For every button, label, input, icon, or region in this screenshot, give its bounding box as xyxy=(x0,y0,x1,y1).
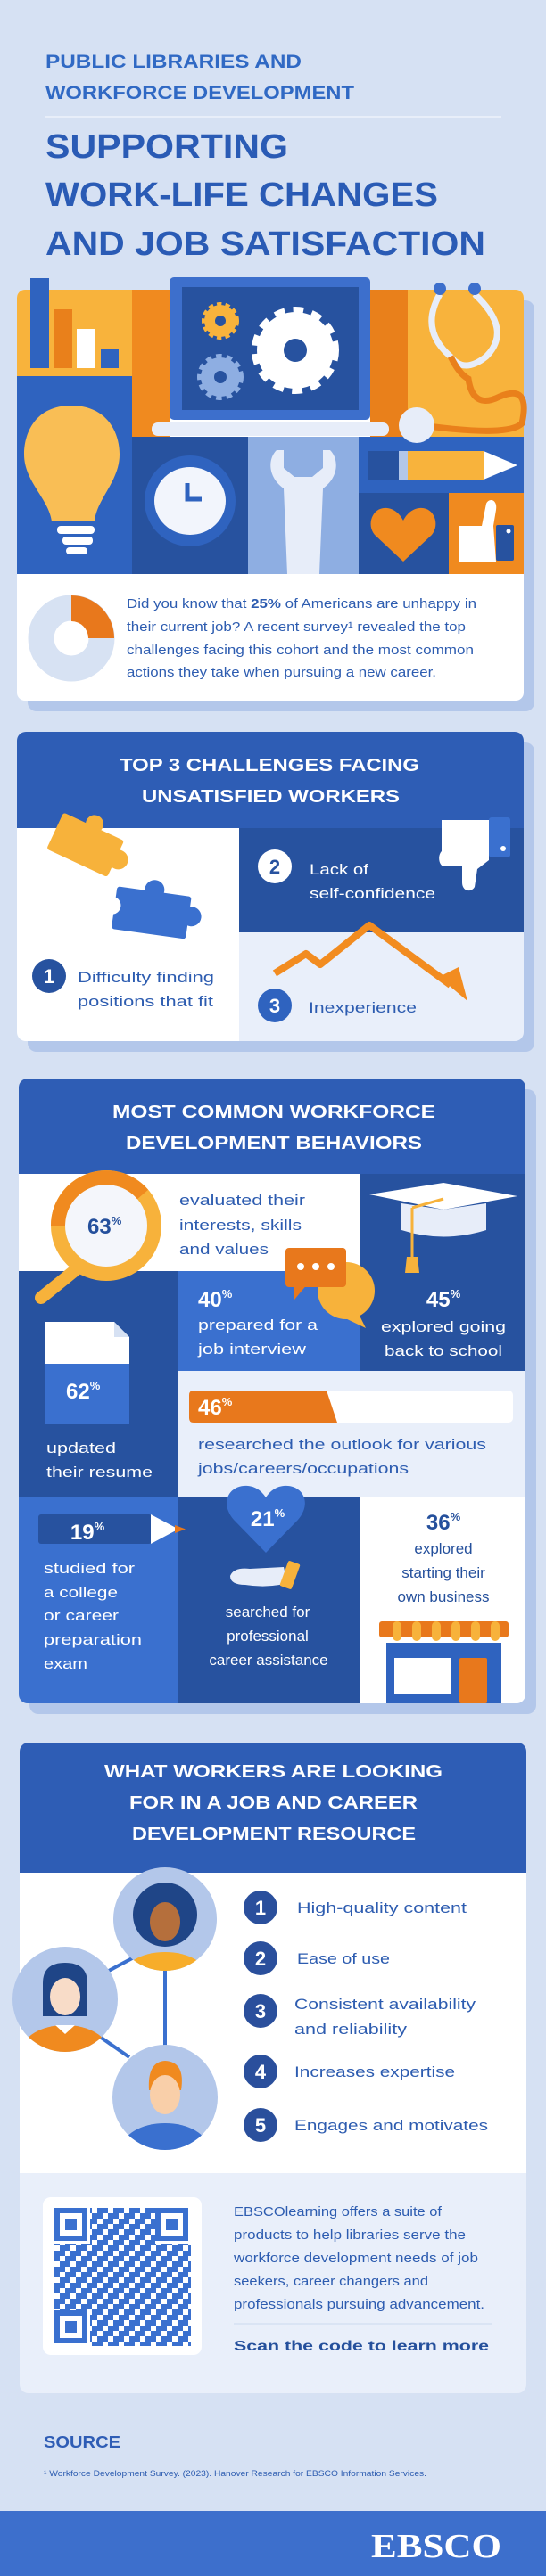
stat 62% resume: updated xyxy=(46,1440,116,1456)
title: AND JOB SATISFACTION xyxy=(46,226,485,263)
heading: challenges: TOP 3 CHALLENGES FACING xyxy=(120,756,419,775)
subtitle xyxy=(46,52,354,103)
item 1 xyxy=(32,959,214,1010)
heading: looking for: WHAT WORKERS ARE LOOKING xyxy=(104,1762,443,1782)
text: EBSCOlearning callout: products to help libraries serve the xyxy=(234,2227,466,2243)
heading: challenges xyxy=(120,756,419,807)
stat 46% bar: jobs/careers/occupations xyxy=(197,1460,409,1477)
stat 21% heart and hand: 21 xyxy=(251,1507,275,1531)
stat 21% heart and hand: professional xyxy=(227,1628,309,1645)
item 2: Lack of xyxy=(310,861,368,878)
title xyxy=(46,128,485,263)
stat 36% shop: explored xyxy=(414,1540,473,1557)
QR code xyxy=(43,2197,202,2355)
stat 63% magnifier: and values xyxy=(179,1241,269,1258)
subtitle: PUBLIC LIBRARIES AND xyxy=(46,52,302,72)
chart: 25% donut xyxy=(41,595,114,669)
heading: behaviors: DEVELOPMENT BEHAVIORS xyxy=(126,1134,422,1153)
panel: top 3 challenges xyxy=(17,732,534,1052)
stat 46% bar: researched the outlook for various xyxy=(198,1436,486,1453)
source: ¹ Workforce Development Survey. (2023). Hanover Research for EBSCO Information Services. xyxy=(44,2469,426,2479)
stat 46% bar: % xyxy=(222,1395,233,1408)
stat 19% pencil: 19 xyxy=(70,1521,95,1545)
heading: behaviors xyxy=(112,1103,435,1153)
icon: thumbs up xyxy=(459,500,514,562)
text: EBSCOlearning callout: professionals pursuing advancement. xyxy=(234,2297,484,2312)
item 3: Inexperience xyxy=(309,999,417,1016)
stat 21% heart and hand xyxy=(209,1486,328,1669)
intro text: their current job? A recent survey¹ revealed the top xyxy=(127,619,466,635)
list: resource priorities: Ease of use xyxy=(297,1950,390,1967)
stat 63% magnifier: 63 xyxy=(87,1215,112,1239)
icon: heart xyxy=(371,508,435,562)
stat 62% resume: 62 xyxy=(66,1380,90,1404)
text: EBSCOlearning callout: Scan the code to learn more xyxy=(234,2339,489,2354)
title: WORK-LIFE CHANGES xyxy=(46,176,438,214)
icon: puzzle pieces xyxy=(46,802,205,941)
heading: behaviors: MOST COMMON WORKFORCE xyxy=(112,1103,435,1122)
source: SOURCE xyxy=(44,2433,120,2451)
list: resource priorities: 4 xyxy=(255,2061,267,2083)
intro text xyxy=(127,596,476,680)
stat 45% graduation cap: explored going xyxy=(381,1318,506,1335)
source xyxy=(44,2433,426,2479)
stat 45% graduation cap: back to school xyxy=(385,1342,502,1359)
footer with EBSCO logo: EBSCO xyxy=(371,2528,501,2565)
stat 62% resume: their resume xyxy=(46,1464,153,1481)
stat 36% shop: starting their xyxy=(401,1564,485,1581)
icon: connected people xyxy=(12,1867,218,2173)
intro text: actions they take when pursuing a new career. xyxy=(127,665,436,680)
item 1: Difficulty finding xyxy=(78,969,214,986)
stat 45% graduation cap: % xyxy=(451,1287,461,1300)
item 3: 3 xyxy=(269,995,280,1017)
stat 36% shop: 36 xyxy=(426,1511,451,1535)
icon: pencil xyxy=(368,451,517,480)
text: EBSCOlearning callout: workforce development needs of job xyxy=(233,2251,478,2266)
icon: laptop with gears xyxy=(152,277,389,436)
stat 19% pencil: or career xyxy=(44,1607,119,1624)
stat 36% shop: % xyxy=(451,1510,461,1523)
list: resource priorities xyxy=(244,1891,488,2142)
stat 62% resume: % xyxy=(90,1379,101,1392)
icon: wrench xyxy=(270,450,336,574)
stat 40% speech bubbles: 40 xyxy=(198,1288,222,1312)
stat 36% shop xyxy=(379,1510,509,1703)
heading: looking for: DEVELOPMENT RESOURCE xyxy=(132,1825,416,1844)
footer with EBSCO logo xyxy=(0,2511,546,2576)
stat 40% speech bubbles: % xyxy=(222,1287,233,1300)
subtitle: WORKFORCE DEVELOPMENT xyxy=(46,83,354,103)
stat 63% magnifier xyxy=(41,1177,305,1298)
item 2: 2 xyxy=(269,856,280,878)
icon: clock xyxy=(145,455,236,546)
stat 19% pencil: studied for xyxy=(44,1560,135,1577)
panel: workforce development behaviors xyxy=(19,1079,536,1714)
intro text: challenges facing this cohort and the most common xyxy=(127,643,474,658)
heading: challenges: UNSATISFIED WORKERS xyxy=(142,787,400,807)
item 1: 1 xyxy=(44,965,54,988)
text: EBSCOlearning callout: EBSCOlearning offers a suite of xyxy=(234,2204,443,2219)
list: resource priorities: and reliability xyxy=(294,2021,408,2038)
stat 21% heart and hand: career assistance xyxy=(209,1652,328,1669)
text: EBSCOlearning callout xyxy=(233,2204,492,2354)
stat 45% graduation cap: 45 xyxy=(426,1288,451,1312)
text: EBSCOlearning callout: seekers, career changers and xyxy=(234,2274,428,2289)
item 1: positions that fit xyxy=(78,993,213,1010)
title: SUPPORTING xyxy=(46,128,288,166)
stat 19% pencil: preparation xyxy=(44,1631,142,1648)
stat 63% magnifier: interests, skills xyxy=(179,1217,302,1234)
stat 21% heart and hand: searched for xyxy=(226,1604,310,1620)
arrow: declining zigzag xyxy=(275,925,467,1001)
list: resource priorities: 3 xyxy=(255,2000,266,2022)
list: resource priorities: High-quality content xyxy=(297,1899,467,1916)
stat 19% pencil: % xyxy=(95,1520,105,1533)
stat 46% bar: 46 xyxy=(198,1396,222,1420)
stat 40% speech bubbles: job interview xyxy=(197,1341,307,1358)
heading: looking for: FOR IN A JOB AND CAREER xyxy=(129,1793,418,1813)
panel: intro illustration and text xyxy=(17,277,534,711)
icon: thumbs down xyxy=(439,817,510,890)
list: resource priorities: Consistent availability xyxy=(294,1996,476,2013)
list: resource priorities: 1 xyxy=(255,1897,266,1919)
icon: stethoscope xyxy=(399,283,524,443)
item 2 xyxy=(258,849,435,902)
list: resource priorities: Engages and motivates xyxy=(294,2117,488,2134)
item 2: self-confidence xyxy=(310,885,435,902)
icon: light bulb xyxy=(24,406,120,554)
list: resource priorities: Increases expertise xyxy=(294,2063,455,2080)
stat 19% pencil: exam xyxy=(44,1655,87,1672)
stat 63% magnifier: evaluated their xyxy=(179,1192,305,1209)
icon: bar chart xyxy=(30,278,119,368)
heading: looking for xyxy=(104,1762,443,1844)
stat 19% pencil xyxy=(38,1514,186,1672)
stat 45% graduation cap xyxy=(369,1183,517,1359)
item 3 xyxy=(258,989,417,1022)
intro text: Did you know that 25% of Americans are unhappy in xyxy=(127,596,476,611)
stat 46% bar xyxy=(189,1391,513,1477)
stat 62% resume xyxy=(45,1322,153,1481)
stat 40% speech bubbles: prepared for a xyxy=(198,1317,318,1333)
list: resource priorities: 2 xyxy=(255,1948,266,1970)
stat 19% pencil: a college xyxy=(44,1584,118,1601)
list: resource priorities: 5 xyxy=(255,2114,266,2137)
stat 40% speech bubbles xyxy=(197,1248,375,1358)
stat 36% shop: own business xyxy=(397,1588,490,1605)
stat 63% magnifier: % xyxy=(112,1214,122,1227)
panel: what workers are looking for xyxy=(12,1743,526,2393)
stat 21% heart and hand: % xyxy=(275,1506,285,1520)
